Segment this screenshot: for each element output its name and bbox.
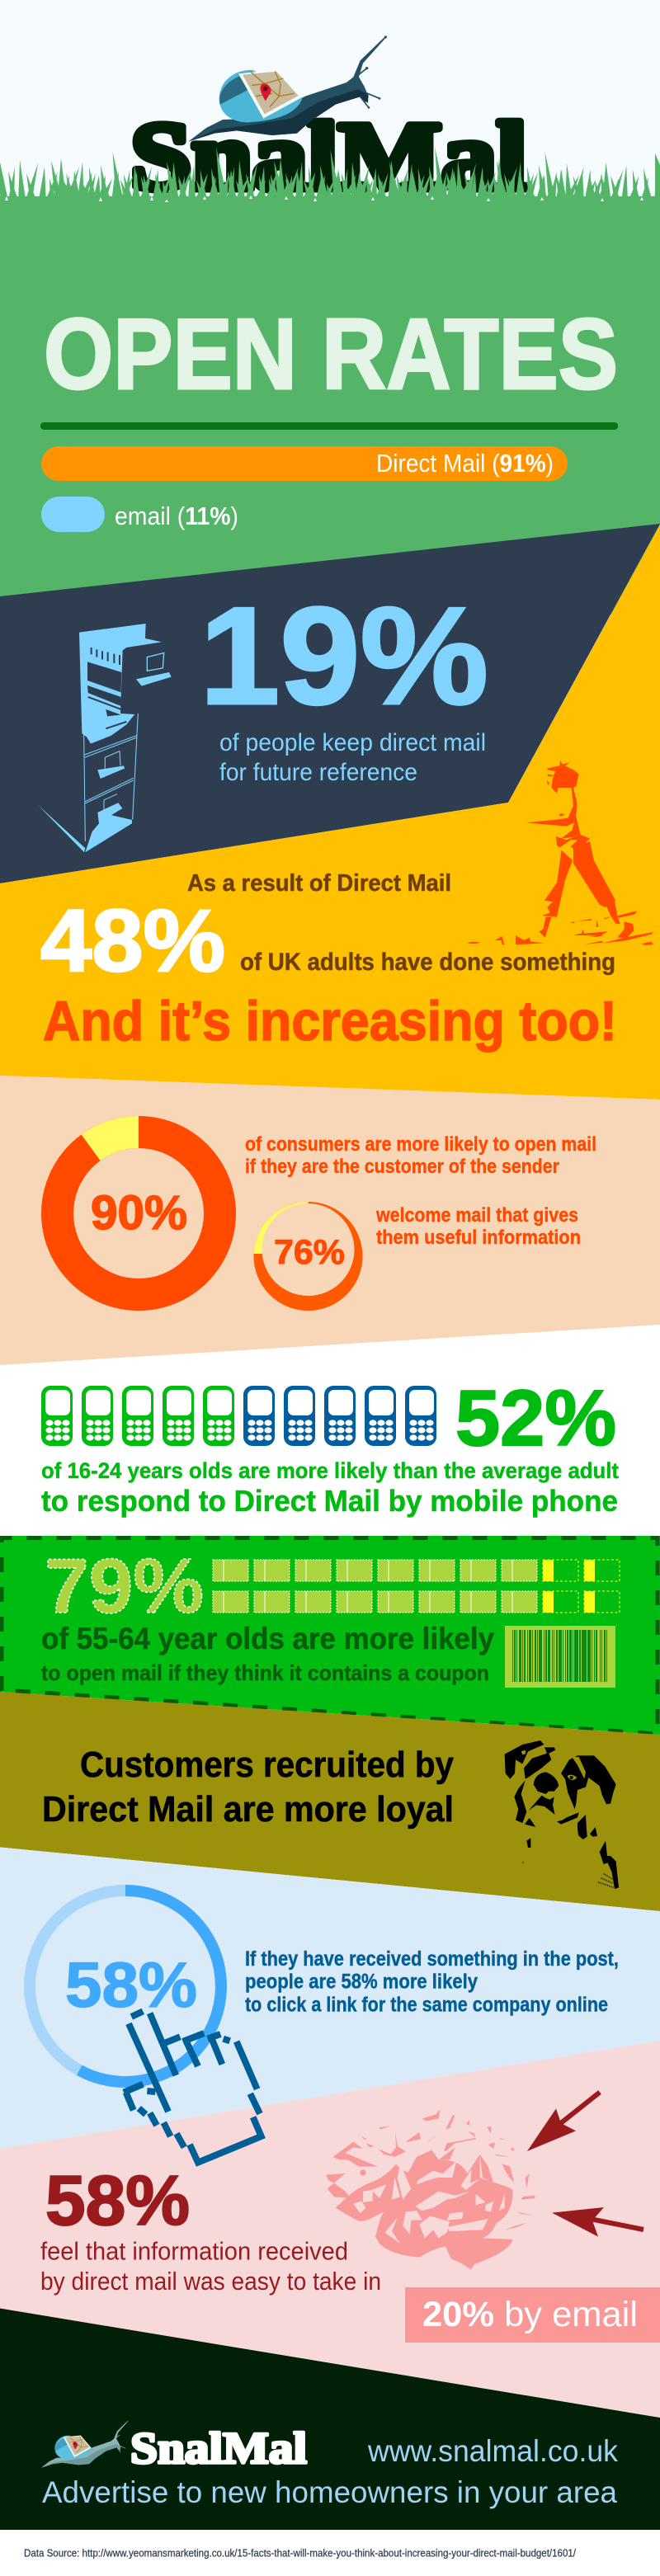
panel: mobile phone response <box>0 1325 660 1537</box>
arrow: lower <box>552 2207 644 2237</box>
text: keep direct mail: of people keep direct mail <box>219 729 486 756</box>
icon: snail with map stamp shell <box>188 35 387 142</box>
bar: email 11%: email (11%) <box>115 502 238 530</box>
text: easy to take in: feel that information received <box>40 2237 348 2265</box>
data source: Data Source: http://www.yeomansmarketing.co.uk/15-facts-that-will-make-you-think-about-increasing-your-direct-mail-budget/1601/ <box>24 2547 576 2559</box>
panel: consumers donuts <box>0 1076 660 1365</box>
text: UK adults: of UK adults have done something <box>240 949 615 976</box>
callout: 20% by email: 20% by email <box>422 2295 638 2334</box>
text: easy to take in: by direct mail was easy to take in <box>40 2267 381 2296</box>
text: 16-24 year olds: of 16-24 years olds are more likely than the average adult <box>41 1458 619 1483</box>
grass <box>0 147 660 206</box>
text: customer of sender: of consumers are more likely to open mail <box>245 1133 596 1156</box>
text: welcome mail: them useful information <box>376 1227 581 1249</box>
bar: direct mail 91%: Direct Mail (91%) <box>376 449 554 478</box>
text: customers more loyal: Customers recruited by <box>80 1745 454 1785</box>
panel: 19% keep direct mail <box>0 524 660 883</box>
text: welcome mail: welcome mail that gives <box>375 1204 578 1227</box>
text: respond by mobile: to respond to Direct Mail by mobile phone <box>41 1484 618 1518</box>
text: contains a coupon: to open mail if they think it contains a coupon <box>41 1660 489 1685</box>
text: keep direct mail: for future reference <box>219 759 417 786</box>
chart: 76% donut: 76% <box>274 1232 345 1271</box>
panel: loyalty <box>0 1692 660 1911</box>
chart: 58% ring <box>30 1891 221 2082</box>
chart: coupon tickets <box>213 1560 620 1613</box>
chart: 90% donut: 90% <box>91 1186 187 1240</box>
icon: filing cabinet <box>38 624 172 852</box>
panel: coupon <box>0 1536 660 1735</box>
panel: 48% of UK adults <box>0 525 660 1100</box>
icon: pixel hand cursor <box>124 2011 262 2163</box>
text: keep direct mail <box>219 729 486 786</box>
stat: 48%: 48% <box>40 891 225 990</box>
panel: easy to take in <box>0 2041 660 2418</box>
footer logo snail <box>41 2421 129 2468</box>
text: click a link <box>245 1947 619 2016</box>
chart: 58% ring: 58% <box>65 1950 197 2021</box>
text: click a link: to click a link for the same company online <box>245 1993 608 2016</box>
arrow: upper <box>527 2092 600 2151</box>
bar: email 11% <box>41 497 238 532</box>
text: welcome mail <box>375 1204 581 1249</box>
heading: increasing: And it’s increasing too! <box>43 990 617 1053</box>
callout: 20% by email <box>405 2287 660 2343</box>
text: easy to take in <box>40 2237 381 2296</box>
title rule <box>40 422 618 430</box>
icon row: ten phones <box>41 1386 436 1446</box>
footer logo wordmark: SnalMal <box>130 2423 307 2473</box>
stat: 19%: 19% <box>200 578 488 733</box>
stat: 79%: 79% <box>45 1542 204 1629</box>
icon: brain <box>326 2109 535 2270</box>
text: click a link: people are 58% more likely <box>245 1970 478 1993</box>
footer tagline: Advertise to new homeowners in your area <box>42 2475 617 2509</box>
chart: 76% donut <box>254 1202 363 1311</box>
footer website: www.snalmal.co.uk <box>367 2434 618 2468</box>
coupon dashed border <box>0 1538 658 1734</box>
text: 55-64 year olds: of 55-64 year olds are more likely <box>41 1622 494 1655</box>
panel: open rates <box>0 202 660 615</box>
text: customers more loyal <box>42 1745 454 1830</box>
icon: walking person <box>467 761 653 945</box>
text: customer of sender: if they are the customer of the sender <box>245 1156 559 1178</box>
icon: barcode <box>505 1626 615 1688</box>
text: customers more loyal: Direct Mail are more loyal <box>42 1789 454 1830</box>
text: customer of sender <box>245 1133 596 1178</box>
panel: click a link <box>0 1848 660 2149</box>
bar: direct mail 91% <box>41 446 568 481</box>
text: as a result: As a result of Direct Mail <box>187 870 451 897</box>
stat: 58%: 58% <box>45 2162 190 2240</box>
logo wordmark: SnalMal <box>130 102 527 210</box>
icon: dog <box>505 1740 619 1889</box>
panel: footer <box>0 2308 660 2530</box>
stat: 52%: 52% <box>455 1374 616 1462</box>
chart: 90% donut <box>58 1116 219 1295</box>
panel: header with logo and grass <box>0 0 660 210</box>
